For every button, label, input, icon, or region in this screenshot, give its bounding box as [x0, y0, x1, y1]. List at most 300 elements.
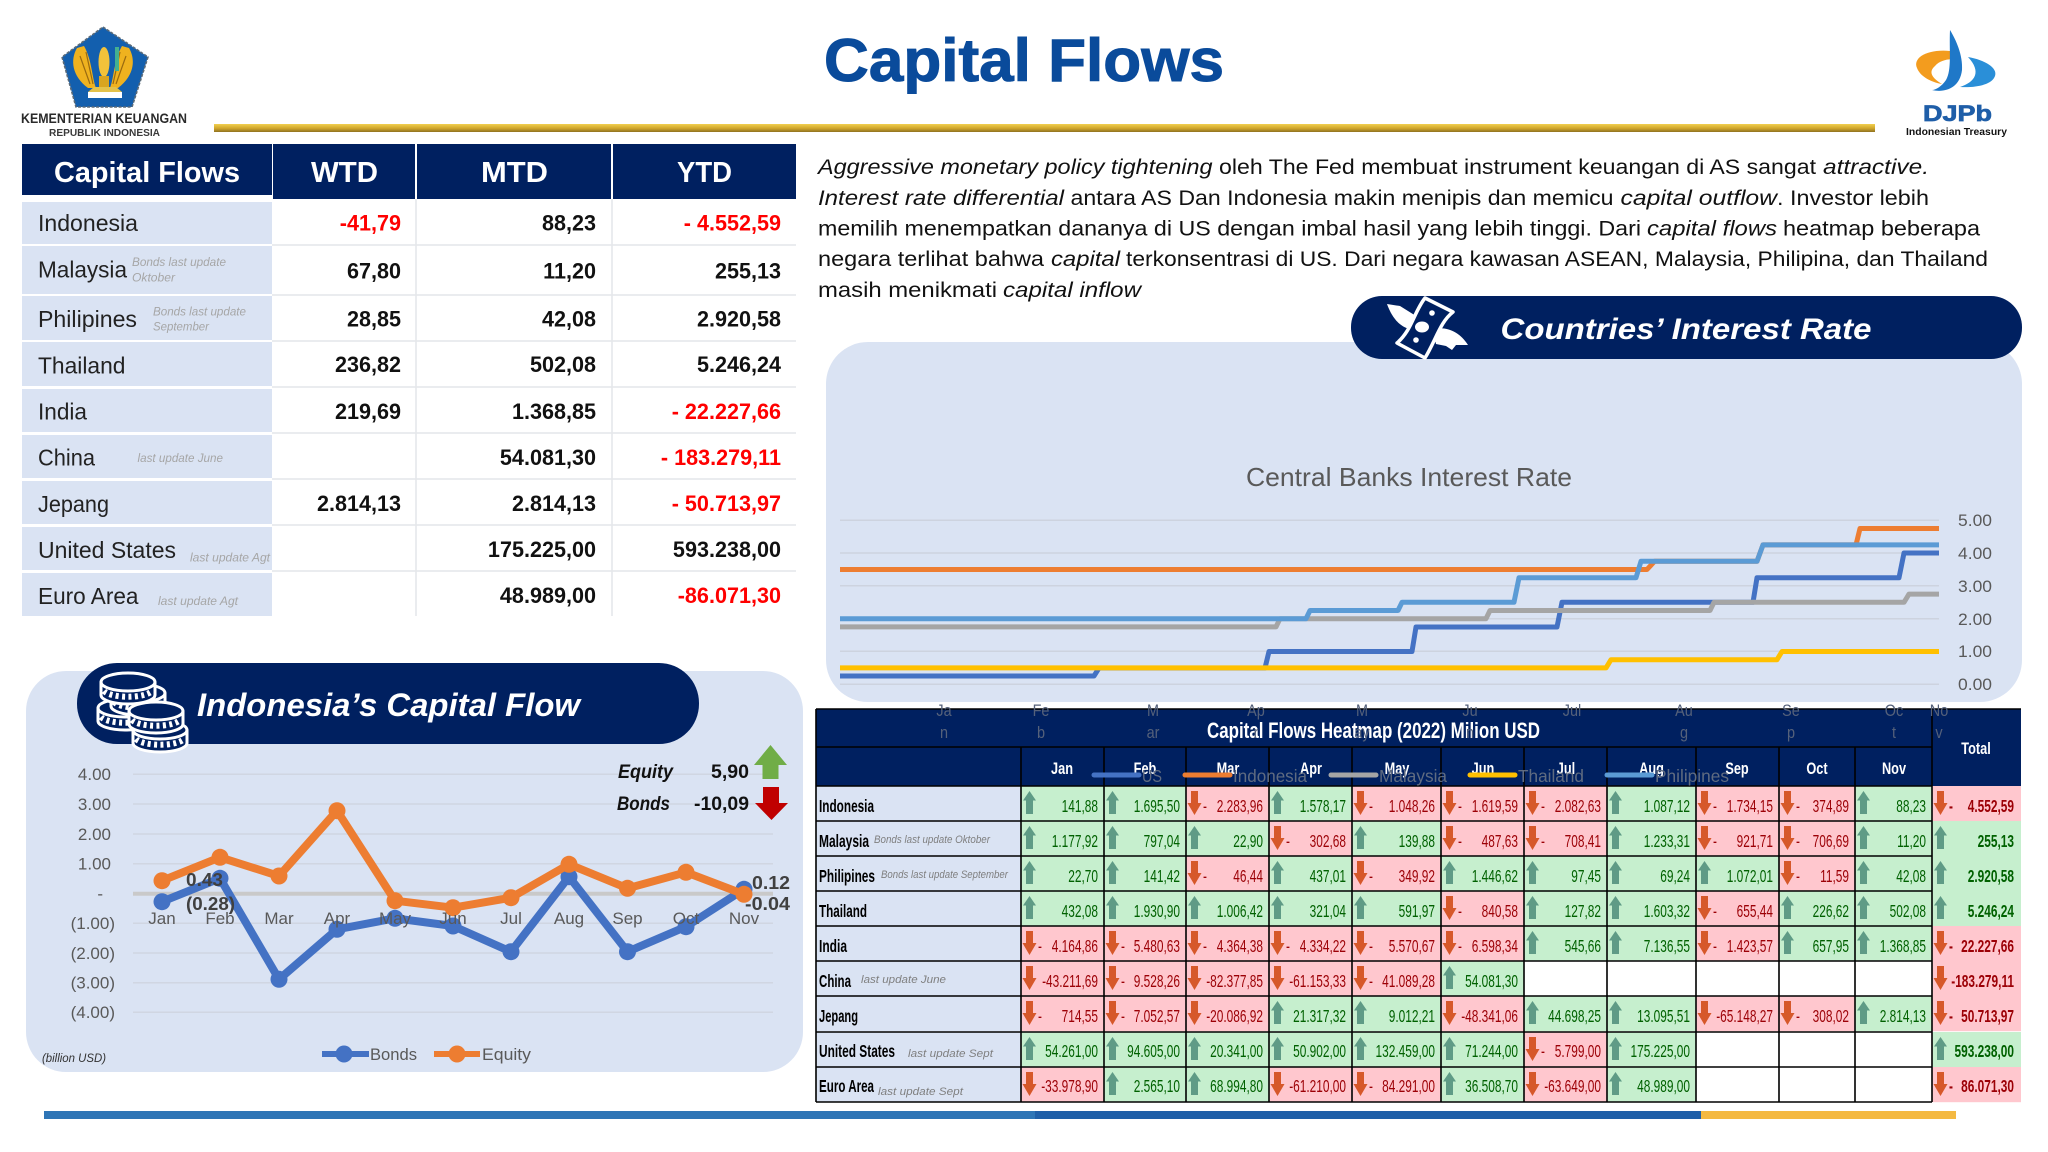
- heatmap row: China: -43.211,69: [1042, 972, 1098, 992]
- interest chart x axis labels overflowing onto heatmap: p: [1787, 724, 1795, 742]
- heatmap row: India: -: [1713, 937, 1717, 957]
- x axis labels: Aug: [554, 909, 584, 928]
- row: Thailand: Thailand: [38, 352, 126, 378]
- heatmap row: United States: last update Sept: [908, 1048, 994, 1060]
- data labels: 0.43: [186, 870, 223, 890]
- heatmap row: Indonesia: -: [1458, 797, 1462, 817]
- heatmap row: India: India: [819, 936, 847, 956]
- x axis labels: Feb: [205, 909, 235, 928]
- heatmap row: Euro Area: -61.210,00: [1289, 1077, 1346, 1097]
- heatmap row: China: -: [1369, 972, 1373, 992]
- heatmap header: Nov: [1882, 759, 1907, 779]
- heading pill: Countries' Interest Rate: [1351, 296, 2022, 359]
- y axis labels: 2.00: [1958, 610, 1992, 629]
- heatmap row: Thailand: 591,97: [1399, 902, 1435, 922]
- x axis labels: Mar: [264, 909, 294, 928]
- heatmap row: Euro Area: 84.291,00: [1382, 1077, 1435, 1097]
- heatmap row: United States: -: [1541, 1042, 1545, 1062]
- icon: flying banknote: [1387, 298, 1468, 358]
- heatmap row: Philipines: 437,01: [1310, 867, 1346, 887]
- interest chart x axis labels overflowing onto heatmap: Fe: [1033, 702, 1050, 720]
- row: United States: 593.238,00: [673, 537, 781, 562]
- heatmap header: Feb: [1134, 759, 1156, 779]
- interest chart legend overflowing onto heatmap: Thailand: [1518, 766, 1584, 786]
- heatmap row: India: 1.423,57: [1727, 937, 1773, 957]
- heatmap row: India: 657,95: [1813, 937, 1849, 957]
- interest chart x axis labels overflowing onto heatmap: Se: [1782, 702, 1800, 720]
- title: Capital Flows: [824, 27, 1224, 94]
- heatmap row: Euro Area: Euro Area: [819, 1076, 874, 1096]
- heatmap row: Indonesia: 1.734,15: [1727, 797, 1773, 817]
- heatmap row: United States: United States: [819, 1041, 895, 1061]
- heatmap row: Philipines: 22,70: [1068, 867, 1098, 887]
- equity summary: [618, 745, 787, 783]
- logo: Kementerian Keuangan: [21, 27, 187, 139]
- panel: central banks interest rate chart: [826, 342, 2022, 702]
- series: US: [840, 553, 1939, 676]
- heatmap row: United States: 94.605,00: [1127, 1042, 1180, 1062]
- heading pill: Indonesia's Capital Flow: [77, 663, 699, 752]
- y axis labels: 3.00: [1958, 577, 1992, 596]
- row: China: last update June: [138, 453, 223, 465]
- interest chart legend overflowing onto heatmap: Malaysia: [1379, 766, 1447, 786]
- heatmap row: Malaysia: 302,68: [1310, 832, 1346, 852]
- heatmap row: Indonesia: -: [1541, 797, 1545, 817]
- heatmap row: Malaysia: -: [1286, 832, 1290, 852]
- series: Indonesia: [840, 528, 1939, 570]
- y axis labels: -: [97, 884, 103, 904]
- heatmap row: Jepang: -20.086,92: [1206, 1007, 1263, 1027]
- interest chart x axis labels overflowing onto heatmap: Ap: [1247, 702, 1265, 720]
- heatmap row: Indonesia: 2.082,63: [1555, 797, 1601, 817]
- row: Philipines: September: [153, 322, 210, 334]
- row: India: [38, 398, 781, 424]
- heatmap row: Thailand: 432,08: [1062, 902, 1098, 922]
- heatmap row: Thailand: -: [1458, 902, 1462, 922]
- text block: commentary paragraph: capital inflow: [1003, 278, 1143, 302]
- interest chart x axis labels overflowing onto heatmap: M: [1147, 702, 1159, 720]
- heatmap row: Jepang: 714,55: [1062, 1007, 1098, 1027]
- heatmap row: Malaysia: 255,13: [1978, 832, 2014, 852]
- heatmap row: India: 22.227,66: [1961, 937, 2014, 957]
- heatmap row: United States: 132.459,00: [1376, 1042, 1435, 1062]
- heatmap header: Oct: [1806, 759, 1828, 779]
- y axis labels: 4.00: [1958, 544, 1992, 563]
- heatmap row: Philipines: 11,59: [1820, 867, 1849, 887]
- text block: commentary paragraph: capital outflow: [1620, 186, 1779, 210]
- heatmap row: Indonesia: 4.552,59: [1968, 797, 2014, 817]
- heatmap row: Jepang: 2.814,13: [1880, 1007, 1926, 1027]
- row: Thailand: 236,82: [335, 352, 401, 377]
- heatmap row: China: China: [819, 971, 851, 991]
- interest chart x axis labels overflowing onto heatmap: Au: [1675, 702, 1693, 720]
- row: Philipines: 28,85: [347, 306, 401, 332]
- series: Malaysia: [840, 594, 1939, 627]
- row: India: India: [38, 398, 87, 424]
- heatmap row: India: -: [1949, 937, 1953, 957]
- row: Indonesia: 88,23: [542, 210, 596, 236]
- text block: commentary paragraph: . Investor lebih: [1777, 186, 1929, 210]
- row: Philipines: Philipines: [38, 306, 137, 332]
- series: Thailand: [840, 652, 1939, 668]
- unit note: (billion USD): [42, 1051, 106, 1065]
- heatmap row: Philipines: 46,44: [1233, 867, 1263, 887]
- interest chart x axis labels overflowing onto heatmap: ar: [1147, 724, 1159, 742]
- y axis labels: [71, 765, 115, 1022]
- interest chart x axis labels overflowing onto heatmap: ay: [1354, 724, 1370, 742]
- heatmap row: Malaysia: 708,41: [1565, 832, 1601, 852]
- text block: commentary paragraph: capital flows: [1647, 216, 1777, 240]
- heatmap header: Jun: [1472, 759, 1494, 779]
- heatmap row: China: [816, 961, 2021, 996]
- heatmap header: May: [1385, 759, 1410, 779]
- interest chart x axis labels overflowing onto heatmap: Jul: [1563, 702, 1581, 720]
- heatmap row: Malaysia: 22,90: [1233, 832, 1263, 852]
- heatmap row: Euro Area: 2.565,10: [1134, 1077, 1180, 1097]
- heatmap header: [816, 709, 2021, 786]
- heatmap row: Euro Area: 48.989,00: [1637, 1077, 1690, 1097]
- interest chart x axis labels overflowing onto heatmap: Ja: [936, 702, 952, 720]
- interest chart x axis labels overflowing onto heatmap: b: [1037, 724, 1045, 742]
- gold title rule: [214, 124, 1875, 132]
- row: Malaysia: 67,80: [347, 258, 401, 284]
- heatmap row: Jepang: 13.095,51: [1637, 1007, 1690, 1027]
- row: Philipines: [38, 306, 781, 334]
- logo: DJPb Indonesian Treasury: DJPb: [1923, 101, 1992, 126]
- heatmap header: Jan: [1051, 759, 1073, 779]
- row: Malaysia: Bonds last update: [132, 257, 226, 269]
- x axis labels: Sep: [612, 909, 643, 928]
- interest chart legend overflowing onto heatmap: Indonesia: [1233, 766, 1307, 786]
- heatmap row: Euro Area: -: [1369, 1077, 1373, 1097]
- heatmap row: Indonesia: 374,89: [1813, 797, 1849, 817]
- heatmap row: Indonesia: 1.619,59: [1472, 797, 1518, 817]
- heatmap row: Indonesia: -: [1203, 797, 1207, 817]
- heatmap row: Indonesia: -: [1796, 797, 1800, 817]
- table header row: MTD: [481, 157, 548, 189]
- table header row: [22, 144, 796, 199]
- row: Indonesia: - 4.552,59: [684, 210, 781, 236]
- x axis labels: Jul: [500, 909, 522, 928]
- heading pill: Countries' Interest Rate: Countries’ Interest Rate: [1500, 313, 1872, 346]
- y axis labels: 0.00: [1958, 675, 1992, 694]
- heatmap row: United States: 20.341,00: [1210, 1042, 1263, 1062]
- heatmap row: Indonesia: -: [1713, 797, 1717, 817]
- heatmap row: India: 5.480,63: [1134, 937, 1180, 957]
- y axis labels: 1.00: [78, 854, 111, 874]
- heatmap row: Malaysia: 921,71: [1737, 832, 1773, 852]
- interest chart x axis labels overflowing onto heatmap: v: [1935, 724, 1943, 742]
- row: China: - 183.279,11: [661, 445, 781, 470]
- heatmap header: Jul: [1557, 759, 1575, 779]
- heatmap row: Jepang: 308,02: [1813, 1007, 1849, 1027]
- heatmap row: Philipines: -: [1203, 867, 1207, 887]
- interest chart x axis labels overflowing onto heatmap: g: [1680, 724, 1688, 742]
- heatmap row: United States: 71.244,00: [1465, 1042, 1518, 1062]
- arrow: bonds down: [755, 787, 788, 820]
- row: India: - 22.227,66: [672, 399, 781, 424]
- row: Indonesia: [38, 210, 781, 236]
- heatmap row: Philipines: 141,42: [1144, 867, 1180, 887]
- row: Euro Area: last update Agt: [158, 596, 239, 608]
- heatmap row: United States: 175.225,00: [1631, 1042, 1690, 1062]
- data labels: 0.12: [752, 873, 790, 893]
- row: China: China: [38, 444, 95, 470]
- arrow: equity up: [754, 745, 787, 779]
- heatmap row: Malaysia: 1.233,31: [1644, 832, 1690, 852]
- y axis labels: (3.00): [71, 974, 115, 992]
- heatmap row: Euro Area: last update Sept: [878, 1086, 964, 1098]
- heatmap row: India: 545,66: [1565, 937, 1601, 957]
- heatmap row: Malaysia: -: [1541, 832, 1545, 852]
- heatmap row: India: -: [1369, 937, 1373, 957]
- logo: DJPb Indonesian Treasury: Indonesian Treasury: [1906, 126, 2007, 138]
- y axis labels: (4.00): [71, 1003, 115, 1022]
- heatmap row: India: 6.598,34: [1472, 937, 1518, 957]
- y axis labels: (2.00): [71, 944, 115, 963]
- heatmap row: Euro Area: [816, 1067, 2021, 1102]
- heatmap row: Euro Area: 86.071,30: [1961, 1077, 2014, 1097]
- heatmap row: China: last update June: [861, 974, 946, 986]
- table header row: WTD: [311, 157, 378, 189]
- heading pill: Indonesia's Capital Flow: Indonesia’s Capital Flow: [197, 687, 582, 723]
- heatmap row: Indonesia: 1.578,17: [1300, 797, 1346, 817]
- heatmap header: Total: [1961, 739, 1991, 759]
- row: Jepang: 2.814,13: [512, 491, 596, 516]
- heatmap row: Philipines: -: [1796, 867, 1800, 887]
- heatmap row: Euro Area: 36.508,70: [1465, 1077, 1518, 1097]
- logo: DJPb Indonesian Treasury: [1906, 30, 2007, 138]
- data labels: -0.04: [745, 894, 790, 914]
- y axis labels: (1.00): [71, 914, 115, 933]
- interest chart x axis labels overflowing onto heatmap: M: [1356, 702, 1368, 720]
- heatmap row: Malaysia: 11,20: [1897, 832, 1926, 852]
- heatmap row: Jepang: 44.698,25: [1548, 1007, 1601, 1027]
- table header row: Capital Flows: [54, 157, 240, 189]
- heatmap row: Philipines: Bonds last update September: [881, 869, 1009, 881]
- text block: commentary paragraph: heatmap beberapa: [1783, 216, 1980, 240]
- row: United States: 175.225,00: [488, 537, 596, 562]
- text block: commentary paragraph: negara terlihat bahwa: [818, 247, 1044, 271]
- heatmap header: Aug: [1639, 759, 1664, 779]
- row: Malaysia: [38, 256, 781, 284]
- heatmap row: Malaysia: 1.177,92: [1052, 832, 1098, 852]
- heatmap row: Philipines: 2.920,58: [1968, 867, 2014, 887]
- row: Indonesia: Indonesia: [38, 210, 138, 236]
- data labels: [186, 870, 790, 914]
- interest chart x axis labels overflowing onto heatmap: t: [1892, 724, 1897, 742]
- row: United States: United States: [38, 537, 176, 563]
- row: China: [38, 444, 781, 470]
- heatmap row: United States: 50.902,00: [1293, 1042, 1346, 1062]
- heatmap row: Philipines: 1.072,01: [1727, 867, 1773, 887]
- row: Euro Area: 48.989,00: [500, 583, 596, 608]
- text block: commentary paragraph: terkonsentrasi di US. Dari negara kawasan ASEAN, Malaysia, Philipina, dan Thailand: [1126, 247, 1988, 271]
- heatmap row: Thailand: 321,04: [1310, 902, 1346, 922]
- row: Malaysia: 11,20: [543, 258, 596, 284]
- heatmap row: China: 9.528,26: [1134, 972, 1180, 992]
- heatmap row: India: 4.164,86: [1052, 937, 1098, 957]
- heatmap row: Indonesia: 1.695,50: [1134, 797, 1180, 817]
- heatmap row: Malaysia: 139,88: [1399, 832, 1435, 852]
- y axis labels: 1.00: [1958, 642, 1992, 661]
- interest chart x axis labels overflowing onto heatmap: n: [940, 724, 948, 742]
- legend: Bonds: [370, 1045, 417, 1064]
- row: Philipines: 42,08: [542, 306, 596, 332]
- y axis labels: 2.00: [78, 825, 111, 844]
- text block: commentary paragraph: [816, 155, 1988, 302]
- heatmap row: Jepang: 7.052,57: [1134, 1007, 1180, 1027]
- row: Euro Area: Euro Area: [38, 583, 139, 609]
- heatmap row: Malaysia: -: [1713, 832, 1717, 852]
- heatmap row: Thailand: 840,58: [1482, 902, 1518, 922]
- text block: commentary paragraph: masih menikmati: [818, 278, 997, 302]
- equity summary: 5,90: [711, 762, 749, 783]
- heatmap row: United States: 54.261,00: [1045, 1042, 1098, 1062]
- heatmap row: Malaysia: 487,63: [1482, 832, 1518, 852]
- y axis labels: 4.00: [78, 765, 111, 784]
- heatmap row: Malaysia: -: [1796, 832, 1800, 852]
- legend: Equity: [482, 1045, 532, 1064]
- heatmap row: India: -: [1286, 937, 1290, 957]
- y axis labels: [1958, 511, 1992, 694]
- heatmap row: China: -: [1121, 972, 1125, 992]
- heatmap row: Thailand: 5.246,24: [1968, 902, 2014, 922]
- x axis labels: Apr: [324, 909, 351, 928]
- heatmap row: China: 54.081,30: [1465, 972, 1518, 992]
- heatmap row: Philipines: 349,92: [1399, 867, 1435, 887]
- heatmap row: Philipines: 69,24: [1660, 867, 1690, 887]
- interest chart legend overflowing onto heatmap: Philipines: [1655, 766, 1729, 786]
- logo: Kementerian Keuangan: REPUBLIK INDONESIA: [49, 127, 160, 139]
- heatmap row: Indonesia: -: [1369, 797, 1373, 817]
- heatmap row: India: -: [1038, 937, 1042, 957]
- row: Jepang: [38, 491, 781, 517]
- x axis labels: Oct: [673, 909, 699, 928]
- heatmap row: United States: 5.799,00: [1555, 1042, 1601, 1062]
- heatmap row: United States: [816, 1032, 2021, 1067]
- series: Bonds: [154, 868, 752, 988]
- x axis labels: May: [379, 909, 412, 928]
- text block: commentary paragraph: antara AS Dan Indonesia makin menipis dan memicu: [1070, 186, 1614, 210]
- heatmap row: Thailand: 1.930,90: [1134, 902, 1180, 922]
- heatmap row: India: [816, 926, 2021, 961]
- heatmap row: India: -: [1121, 937, 1125, 957]
- heatmap row: Jepang: 21.317,32: [1293, 1007, 1346, 1027]
- heatmap header: Capital Flows Heatmap (2022) Milion USD: [1207, 718, 1540, 743]
- heatmap row: Philipines: 1.446,62: [1472, 867, 1518, 887]
- heatmap row: India: 4.334,22: [1300, 937, 1346, 957]
- panel: capital flows summary table: [22, 144, 796, 616]
- heatmap row: Thailand: Thailand: [819, 901, 867, 921]
- row: United States: [38, 537, 781, 564]
- row: China: 54.081,30: [500, 445, 596, 470]
- text block: commentary paragraph: Interest rate differential: [818, 186, 1065, 210]
- y axis labels: 3.00: [78, 795, 111, 814]
- interest chart legend overflowing onto heatmap: [1094, 766, 1729, 786]
- heatmap row: India: -: [1458, 937, 1462, 957]
- heatmap row: Jepang: 50.713,97: [1961, 1007, 2014, 1027]
- heatmap row: Jepang: 9.012,21: [1389, 1007, 1435, 1027]
- heatmap row: Malaysia: 706,69: [1813, 832, 1849, 852]
- heatmap row: China: 41.089,28: [1382, 972, 1435, 992]
- heatmap row: Philipines: Philipines: [819, 866, 875, 886]
- heatmap row: Thailand: 1.006,42: [1217, 902, 1263, 922]
- heatmap row: Malaysia: Bonds last update Oktober: [874, 834, 991, 846]
- heatmap row: Malaysia: -: [1458, 832, 1462, 852]
- row: Thailand: 502,08: [530, 352, 596, 377]
- row: Euro Area: -86.071,30: [678, 583, 781, 608]
- heatmap row: India: -: [1203, 937, 1207, 957]
- heatmap row: Euro Area: -: [1949, 1077, 1953, 1097]
- icon: coin stacks: [98, 673, 187, 752]
- panel: capital flows heatmap: [816, 709, 2021, 1102]
- heatmap row: India: 1.368,85: [1880, 937, 1926, 957]
- heatmap row: Indonesia: -: [1949, 797, 1953, 817]
- chart title: Central Banks Interest Rate: [1246, 462, 1572, 492]
- bonds summary: -10,09: [694, 794, 749, 815]
- heatmap row: Indonesia: Indonesia: [819, 796, 874, 816]
- heatmap row: Thailand: 127,82: [1565, 902, 1601, 922]
- row: India: 219,69: [335, 399, 401, 424]
- heatmap row: Indonesia: 1.087,12: [1644, 797, 1690, 817]
- table header row: YTD: [677, 157, 732, 189]
- heatmap row: Jepang: -48.341,06: [1461, 1007, 1518, 1027]
- x axis labels: [148, 909, 760, 928]
- row: Malaysia: Malaysia: [38, 256, 127, 282]
- row: Jepang: 2.814,13: [317, 491, 401, 516]
- row: Indonesia: -41,79: [340, 210, 401, 236]
- text block: commentary paragraph: Aggressive monetary policy tightening: [816, 155, 1213, 179]
- heatmap row: United States: 593.238,00: [1955, 1042, 2014, 1062]
- data labels: (0.28): [186, 894, 235, 914]
- interest chart legend overflowing onto heatmap: US: [1142, 766, 1162, 786]
- interest chart x axis labels overflowing onto heatmap: No: [1930, 702, 1948, 720]
- heatmap row: Thailand: 655,44: [1737, 902, 1773, 922]
- heatmap row: Indonesia: 2.283,96: [1217, 797, 1263, 817]
- series: Equity: [154, 802, 752, 916]
- row: Thailand: 5.246,24: [697, 352, 782, 377]
- interest chart x axis labels overflowing onto heatmap: Oc: [1885, 702, 1903, 720]
- heatmap row: India: 7.136,55: [1644, 937, 1690, 957]
- heatmap row: Thailand: -: [1713, 902, 1717, 922]
- heatmap row: Jepang: -65.148,27: [1716, 1007, 1773, 1027]
- series: Philipines: [840, 545, 1939, 619]
- row: United States: last update Agt: [190, 552, 271, 564]
- interest chart x axis labels overflowing onto heatmap: [936, 702, 1948, 742]
- interest chart x axis labels overflowing onto heatmap: r: [1254, 724, 1258, 742]
- bonds summary: Bonds: [617, 794, 670, 815]
- legend: [322, 1045, 532, 1064]
- text block: commentary paragraph: attractive.: [1823, 155, 1929, 179]
- heatmap row: China: -183.279,11: [1951, 972, 2014, 992]
- heatmap header: Apr: [1300, 759, 1322, 779]
- heatmap row: Jepang: -: [1121, 1007, 1125, 1027]
- row: Philipines: Bonds last update: [153, 306, 246, 318]
- heatmap header: Mar: [1217, 759, 1239, 779]
- heatmap row: Jepang: [816, 996, 2021, 1031]
- heatmap row: Malaysia: 797,04: [1144, 832, 1180, 852]
- panel: Indonesia's capital flow chart: [26, 671, 803, 1072]
- heatmap row: Thailand: [816, 891, 2021, 926]
- heatmap row: India: 5.570,67: [1389, 937, 1435, 957]
- heatmap row: Euro Area: -33.978,90: [1041, 1077, 1098, 1097]
- x axis labels: Jan: [148, 909, 176, 928]
- bonds summary: [617, 787, 788, 820]
- row: Euro Area: [38, 583, 781, 609]
- heatmap row: China: -61.153,33: [1289, 972, 1346, 992]
- row: Philipines: 2.920,58: [697, 306, 781, 332]
